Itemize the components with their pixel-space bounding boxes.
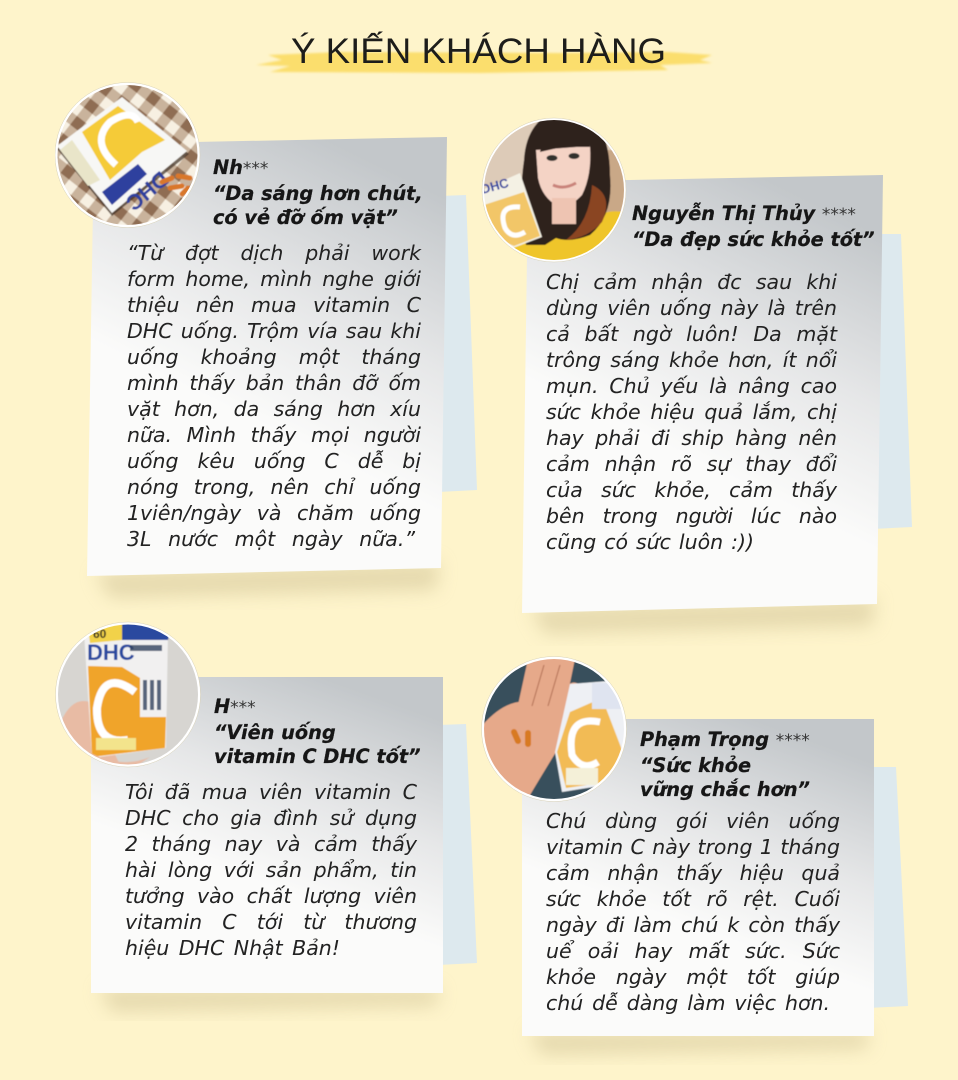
text block: review Nguyễn Thị Thủy: cả bất ngờ luôn! Da mặt: [546, 322, 837, 346]
text block: review Nguyễn Thị Thủy: sức khỏe hiệu quả lắm, chị: [546, 400, 837, 424]
text block: review Phạm Trọng: chú dễ dàng làm việc hơn.: [546, 991, 830, 1015]
text block: review Nguyễn Thị Thủy: dùng viên uống này là trên: [546, 296, 837, 320]
heading: Nguyễn Thị Thủy: “Da đẹp sức khỏe tốt”: [632, 228, 875, 250]
text block: review Phạm Trọng: Chú dùng gói viên uống: [546, 809, 840, 833]
icon: photo of hand holding DHC packet: 60: [93, 627, 107, 641]
panel: review H***: [55, 622, 477, 1016]
text block: review Phạm Trọng: cảm nhận thấy hiệu quả: [546, 861, 840, 885]
text block: review Nh***: DHC uống. Trộm vía sau khi: [127, 319, 421, 343]
panel: review Nguyễn Thị Thủy: [482, 118, 912, 638]
icon: photo of woman holding packet: [479, 112, 630, 265]
icon: photo of DHC packet on checked cloth: [55, 82, 200, 228]
text block: review Nguyễn Thị Thủy: cảm nhận rõ sự thay đổi: [546, 452, 837, 476]
heading: H***: [214, 695, 421, 768]
heading: H***: vitamin C DHC tốt”: [214, 745, 421, 768]
text block: review H***: vitamin C tới từ thương: [125, 910, 417, 934]
text block: review Phạm Trọng: vitamin C này trong 1 tháng: [546, 835, 840, 859]
text block: review Nh***: nữa. Mình thấy mọi người: [127, 423, 421, 447]
text block: review H***: Tôi đã mua viên vitamin C: [125, 780, 417, 804]
text block: review Nh***: “Từ đợt dịch phải work: [127, 241, 421, 265]
heading: Nguyễn Thị Thủy: [632, 202, 875, 250]
text block: review H***: tưởng vào chất lượng viên: [125, 884, 417, 908]
text block: review Phạm Trọng: khỏe ngày một tốt giúp: [546, 965, 840, 989]
text block: review Nh***: form home, mình nghe giới: [127, 267, 421, 291]
heading: H***: “Viên uống: [214, 720, 336, 744]
heading: H***: H***: [214, 695, 256, 718]
text block: review Nguyễn Thị Thủy: bên trong người lúc nào: [546, 504, 837, 528]
text block: review Nguyễn Thị Thủy: mụn. Chủ yếu là nâng cao: [546, 374, 837, 398]
icon: photo of hand holding DHC packet: DHC: [87, 640, 135, 665]
text block: review H***: hiệu DHC Nhật Bản!: [125, 936, 340, 960]
heading: Phạm Trọng: vững chắc hơn”: [640, 778, 810, 801]
text block: review Nh***: vặt hơn, da sáng hơn xíu: [127, 397, 421, 421]
text block: review Nh***: [127, 241, 422, 551]
text block: review Nh***: nóng trong, nên chỉ uống: [127, 475, 421, 499]
text block: review H***: [125, 780, 418, 960]
text block: review Nguyễn Thị Thủy: [546, 270, 838, 554]
text block: review Phạm Trọng: sức khỏe tốt rõ rệt. Cuối: [546, 887, 840, 911]
icon: photo of hand with capsules and packet: [480, 655, 628, 803]
heading: Nguyễn Thị Thủy: Nguyễn Thị Thủy ****: [632, 202, 856, 225]
text block: review Nguyễn Thị Thủy: hay phải đi ship hàng nên: [546, 426, 837, 450]
icon: photo of hand holding DHC packet: [56, 622, 201, 770]
text block: review Nh***: mình thấy bản thân đỡ ốm: [127, 371, 421, 395]
text block: review Nguyễn Thị Thủy: của sức khỏe, cảm thấy: [546, 478, 837, 502]
text block: review Nh***: thiệu nên mua vitamin C: [127, 293, 421, 317]
text block: review Nh***: 1viên/ngày và chăm uống: [127, 501, 421, 525]
heading: Phạm Trọng: “Sức khỏe: [640, 754, 751, 776]
text block: review H***: 2 tháng nay và cảm thấy: [125, 832, 417, 856]
panel: review Phạm Trọng: [481, 656, 908, 1060]
icon: photo of DHC packet on checked cloth: DHC: [121, 166, 173, 216]
text block: review Phạm Trọng: [546, 809, 840, 1015]
heading: Nh***: Nh***: [213, 156, 268, 179]
text block: review Nguyễn Thị Thủy: cũng có sức luôn :)): [546, 530, 754, 554]
panel: review Nh***: [55, 82, 477, 602]
heading: Nh***: “Da sáng hơn chút,: [213, 182, 423, 204]
text block: review Phạm Trọng: uể oải hay mất sức. Sức: [546, 939, 840, 963]
text block: review Nh***: 3L nước một ngày nữa.”: [127, 527, 415, 551]
heading: Phạm Trọng: [640, 728, 810, 801]
text block: review Nguyễn Thị Thủy: Chị cảm nhận đc sau khi: [546, 270, 837, 294]
heading: Phạm Trọng: Phạm Trọng ****: [640, 728, 810, 751]
heading: Nh***: [213, 156, 423, 229]
text block: review Phạm Trọng: ngày đi làm chú k còn thấy: [546, 913, 840, 937]
text block: review H***: DHC cho gia đình sử dụng: [125, 806, 417, 830]
text block: review H***: hài lòng với sản phẩm, tin: [125, 858, 417, 882]
title: Ý KIẾN KHÁCH HÀNG: [291, 31, 666, 71]
text block: review Nh***: uống khoảng một tháng: [127, 345, 421, 369]
text block: review Nguyễn Thị Thủy: trông sáng khỏe hơn, ít nổi: [546, 348, 837, 372]
heading: Nh***: có vẻ đỡ ốm vặt”: [213, 206, 398, 229]
text block: review Nh***: uống kêu uống C dễ bị: [127, 449, 421, 473]
